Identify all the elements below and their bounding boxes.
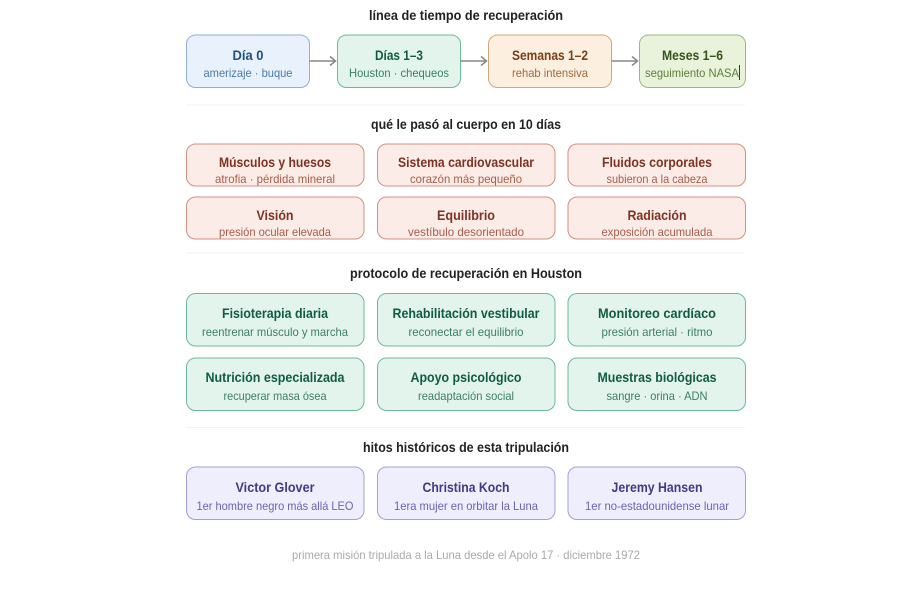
card: Fluidos corporales: [568, 144, 746, 186]
card: Muestras biológicas: Muestras biológicas: [598, 369, 717, 385]
card: Radiación: Radiación: [628, 207, 686, 223]
card: Apoyo psicológico: [378, 358, 555, 410]
card: Rehabilitación vestibular: Rehabilitación vestibular: [392, 305, 540, 321]
card: Christina Koch: 1era mujer en orbitar la Luna: [394, 499, 538, 513]
arrow: Días 1–3 to Semanas 1–2: [460, 56, 486, 66]
panel: timeline: [186, 7, 746, 88]
card: Equilibrio: vestíbulo desorientado: [408, 225, 524, 239]
heading: Houston protocol: protocolo de recuperación en Houston: [350, 265, 582, 281]
card: Equilibrio: Equilibrio: [437, 207, 495, 223]
card: Día 0: amerizaje · buque: [204, 66, 293, 80]
card: Fisioterapia diaria: reentrenar músculo y marcha: [202, 325, 348, 339]
card: Fluidos corporales: Fluidos corporales: [602, 154, 712, 170]
panel: crew milestones: [186, 439, 746, 520]
card: Sistema cardiovascular: Sistema cardiovascular: [398, 154, 534, 170]
card: Día 0: [186, 35, 310, 88]
card: Días 1–3: Días 1–3: [375, 47, 423, 63]
card: Monitoreo cardíaco: Monitoreo cardíaco: [598, 305, 716, 321]
card: Victor Glover: 1er hombre negro más allá LEO: [196, 499, 354, 513]
card: Apoyo psicológico: Apoyo psicológico: [410, 369, 522, 385]
card: Fluidos corporales: subieron a la cabeza: [606, 172, 708, 186]
card: Christina Koch: [378, 467, 555, 520]
card: Christina Koch: Christina Koch: [422, 479, 510, 495]
card: Día 0: Día 0: [232, 47, 264, 63]
card: Días 1–3: Houston · chequeos: [349, 66, 449, 80]
card: Músculos y huesos: [186, 144, 364, 186]
heading: body effects: qué le pasó al cuerpo en 10 días: [371, 116, 561, 132]
heading: timeline: línea de tiempo de recuperación: [369, 7, 563, 23]
card: Muestras biológicas: [568, 358, 746, 410]
arrow: Día 0 to Días 1–3: [310, 56, 336, 66]
card: Rehabilitación vestibular: reconectar el equilibrio: [408, 325, 524, 339]
panel: Houston protocol: [186, 265, 746, 410]
card: Equilibrio: [378, 197, 555, 239]
card: Meses 1–6: Meses 1–6: [662, 47, 723, 63]
card: Monitoreo cardíaco: [568, 294, 746, 346]
card: Sistema cardiovascular: corazón más pequeño: [410, 172, 522, 186]
card: Semanas 1–2: rehab intensiva: [512, 66, 588, 80]
card: Monitoreo cardíaco: presión arterial · ritmo: [602, 325, 713, 339]
heading: crew milestones: hitos históricos de esta tripulación: [363, 439, 569, 455]
card: Nutrición especializada: Nutrición especializada: [206, 369, 345, 385]
footer note: primera misión tripulada a la Luna desde el Apolo 17 · diciembre 1972: [292, 548, 640, 562]
card: Meses 1–6: [640, 35, 746, 88]
card: Muestras biológicas: sangre · orina · ADN: [606, 389, 708, 403]
card: Visión: presión ocular elevada: [219, 225, 331, 239]
card: Meses 1–6: seguimiento NASA: [645, 66, 739, 80]
card: Nutrición especializada: [186, 358, 364, 410]
card: Visión: [186, 197, 364, 239]
card: Fisioterapia diaria: [186, 294, 364, 346]
card: Fisioterapia diaria: Fisioterapia diaria: [222, 305, 328, 321]
card: Semanas 1–2: Semanas 1–2: [512, 47, 588, 63]
card: Semanas 1–2: [488, 35, 612, 88]
card: Victor Glover: [186, 467, 364, 520]
card: Rehabilitación vestibular: [378, 294, 555, 346]
card: Jeremy Hansen: Jeremy Hansen: [612, 479, 702, 495]
card: Radiación: exposición acumulada: [602, 225, 713, 239]
card: Victor Glover: Victor Glover: [236, 479, 315, 495]
card: Músculos y huesos: Músculos y huesos: [219, 154, 331, 170]
card: Sistema cardiovascular: [378, 144, 555, 186]
card: Apoyo psicológico: readaptación social: [418, 389, 514, 403]
panel: body effects: [186, 116, 746, 239]
card: Jeremy Hansen: 1er no-estadounidense lunar: [585, 499, 729, 513]
card: Jeremy Hansen: [568, 467, 746, 520]
arrow: Semanas 1–2 to Meses 1–6: [612, 56, 638, 66]
card: Músculos y huesos: atrofia · pérdida mineral: [215, 172, 335, 186]
card: Visión: Visión: [256, 207, 294, 223]
card: Días 1–3: [338, 35, 460, 88]
card: Nutrición especializada: recuperar masa ósea: [224, 389, 327, 403]
card: Radiación: [568, 197, 746, 239]
